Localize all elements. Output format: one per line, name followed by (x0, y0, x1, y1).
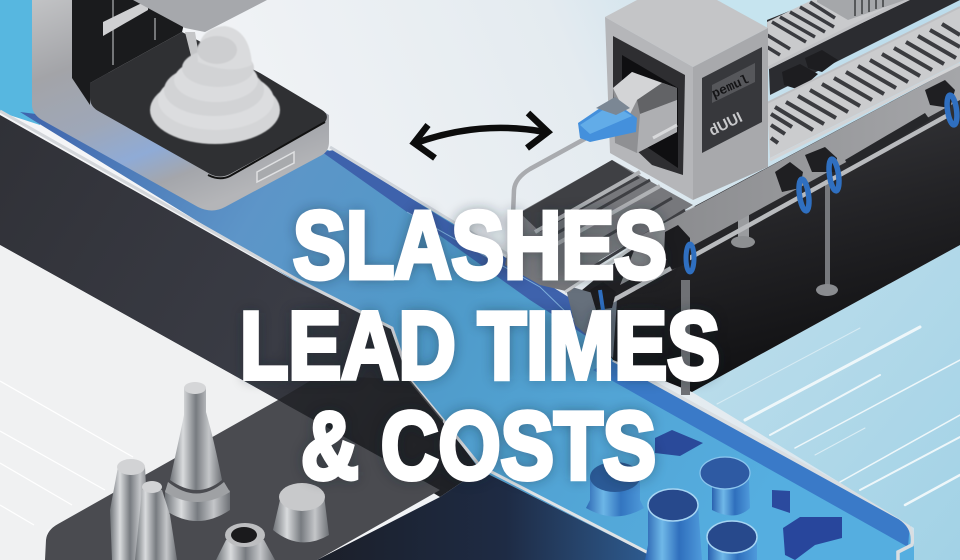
finned block (817, 0, 905, 20)
tray thin light line (407, 212, 600, 345)
printer vertical rails (113, 0, 155, 65)
tray right dark blue band (593, 360, 910, 547)
printer black rear wall (72, 0, 190, 105)
right panel dark (702, 47, 762, 153)
panel: conveyor dark side (570, 65, 960, 392)
window inner (622, 55, 678, 168)
background panel: top right sky (720, 0, 820, 28)
title shadow (240, 192, 720, 500)
panel: navy table front (317, 470, 660, 560)
pole foot: centre (816, 284, 838, 296)
part: cup upper (700, 457, 750, 516)
part: small square (772, 490, 790, 513)
clip 0 (590, 282, 616, 310)
rod: curved feed pipe (513, 136, 590, 215)
blue nozzle (578, 97, 637, 142)
printer print head (133, 0, 267, 32)
conveyor lower left section (505, 160, 695, 292)
rail slit (653, 125, 677, 138)
title: LEAD TIMES (240, 292, 720, 400)
part: large hexagon (783, 517, 842, 560)
tray upper white edge (330, 147, 560, 285)
background panel: left blue strip (0, 0, 40, 125)
window dark frame (613, 36, 685, 175)
title shadow: SLASHES (293, 192, 667, 299)
double-headed arrow (414, 113, 548, 158)
title: & COSTS (301, 392, 656, 500)
part: short cone right (135, 481, 177, 560)
clip 3 (805, 147, 841, 191)
printer (32, 0, 329, 210)
panel: bottom right light blue (692, 245, 960, 560)
rod: front rail (610, 114, 950, 302)
inner block (613, 72, 677, 153)
printer silver body (32, 0, 329, 210)
panel: blue tray (20, 112, 918, 560)
clips (590, 80, 959, 310)
group: metal parts (110, 382, 329, 560)
title shadow: & COSTS (301, 392, 656, 500)
title (240, 192, 720, 500)
printer build plate (90, 32, 327, 176)
plate front lip (208, 122, 325, 178)
tray upper dark blue band (322, 150, 600, 345)
panel label bottom: dUUI (706, 109, 745, 140)
tray lower right white edge (613, 360, 912, 560)
panel: dark diagonal band (0, 115, 480, 497)
clip 4 (925, 80, 959, 125)
conveyor main belt (767, 7, 960, 160)
table shadow patch (278, 375, 443, 490)
machine box (605, 0, 768, 200)
streak lines (717, 327, 960, 505)
part: ring (216, 523, 275, 560)
conveyor gray end panel (565, 285, 617, 358)
clip 1 (664, 225, 694, 272)
part: hexagon recess (655, 430, 703, 456)
printer slot (257, 152, 294, 182)
conveyor rail side (620, 65, 960, 285)
pole: vertical left (681, 280, 690, 395)
part: cup behind text (586, 462, 644, 516)
title: SLASHES (293, 192, 667, 299)
pole: centre (825, 180, 830, 285)
panel: bottom left white (0, 245, 278, 560)
part: cup middle (645, 489, 702, 560)
part: dome (273, 483, 329, 542)
box left face (605, 17, 693, 200)
clip 2 (775, 162, 811, 211)
part: tall cone (165, 382, 230, 521)
group: blue machined parts (586, 430, 842, 560)
pole: left foot (731, 205, 755, 248)
printed spiral object (150, 26, 280, 144)
nozzle tip (185, 32, 200, 62)
display plate (712, 63, 755, 103)
blue tray bottom-left white edge (480, 466, 662, 560)
part: cup front (707, 521, 757, 560)
black boxes (782, 64, 818, 90)
box top face (605, 0, 768, 67)
panel label top: pemul (710, 72, 751, 102)
box right face (693, 28, 768, 200)
printer bracket (103, 0, 148, 36)
conveyor upper far belt (767, 0, 960, 95)
part: short cone left (110, 459, 150, 560)
panel: dark parts table (45, 400, 440, 560)
white streak lines (0, 381, 133, 525)
band white edge (0, 111, 480, 466)
title shadow: LEAD TIMES (240, 292, 720, 400)
conveyor rail shadow slot (845, 113, 930, 168)
